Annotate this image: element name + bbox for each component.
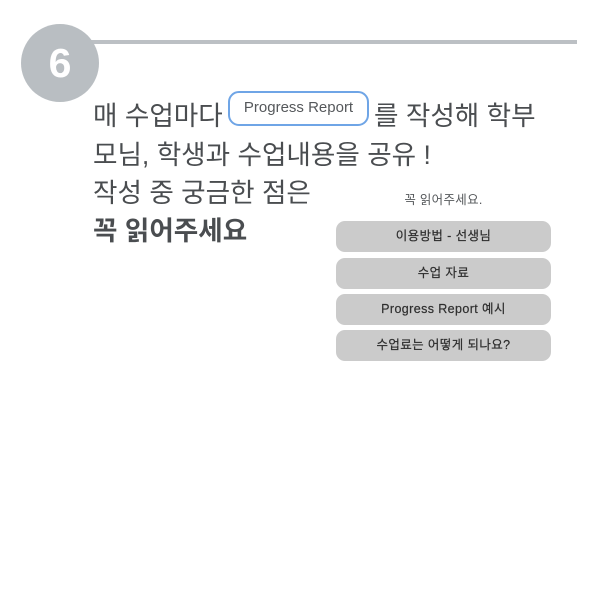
text line 1 end: 를 작성해 학부 xyxy=(374,101,536,131)
faq button 3: Progress Report 예시 xyxy=(381,302,506,316)
faq button 1: 이용방법 - 선생님 xyxy=(396,229,491,243)
faq button 2: 수업 자료 xyxy=(418,266,469,280)
number badge: 6 xyxy=(49,40,71,86)
faq heading: 꼭 읽어주세요. xyxy=(404,193,483,207)
faq button 4 xyxy=(336,330,551,361)
progress report pill xyxy=(228,91,369,126)
number badge xyxy=(21,24,99,102)
header rule xyxy=(90,40,577,44)
faq button 3 xyxy=(336,294,551,325)
text line 1 start: 매 수업마다 xyxy=(93,101,223,131)
faq button 4: 수업료는 어떻게 되나요? xyxy=(376,338,511,352)
text line 4 bold: 꼭 읽어주세요 xyxy=(93,216,247,246)
faq button 2 xyxy=(336,258,551,289)
text line 3: 작성 중 궁금한 점은 xyxy=(93,178,311,208)
text line 2: 모님, 학생과 수업내용을 공유 ! xyxy=(93,140,431,170)
progress report pill: Progress Report xyxy=(244,99,353,116)
faq panel xyxy=(336,193,551,361)
faq button 1 xyxy=(336,221,551,252)
